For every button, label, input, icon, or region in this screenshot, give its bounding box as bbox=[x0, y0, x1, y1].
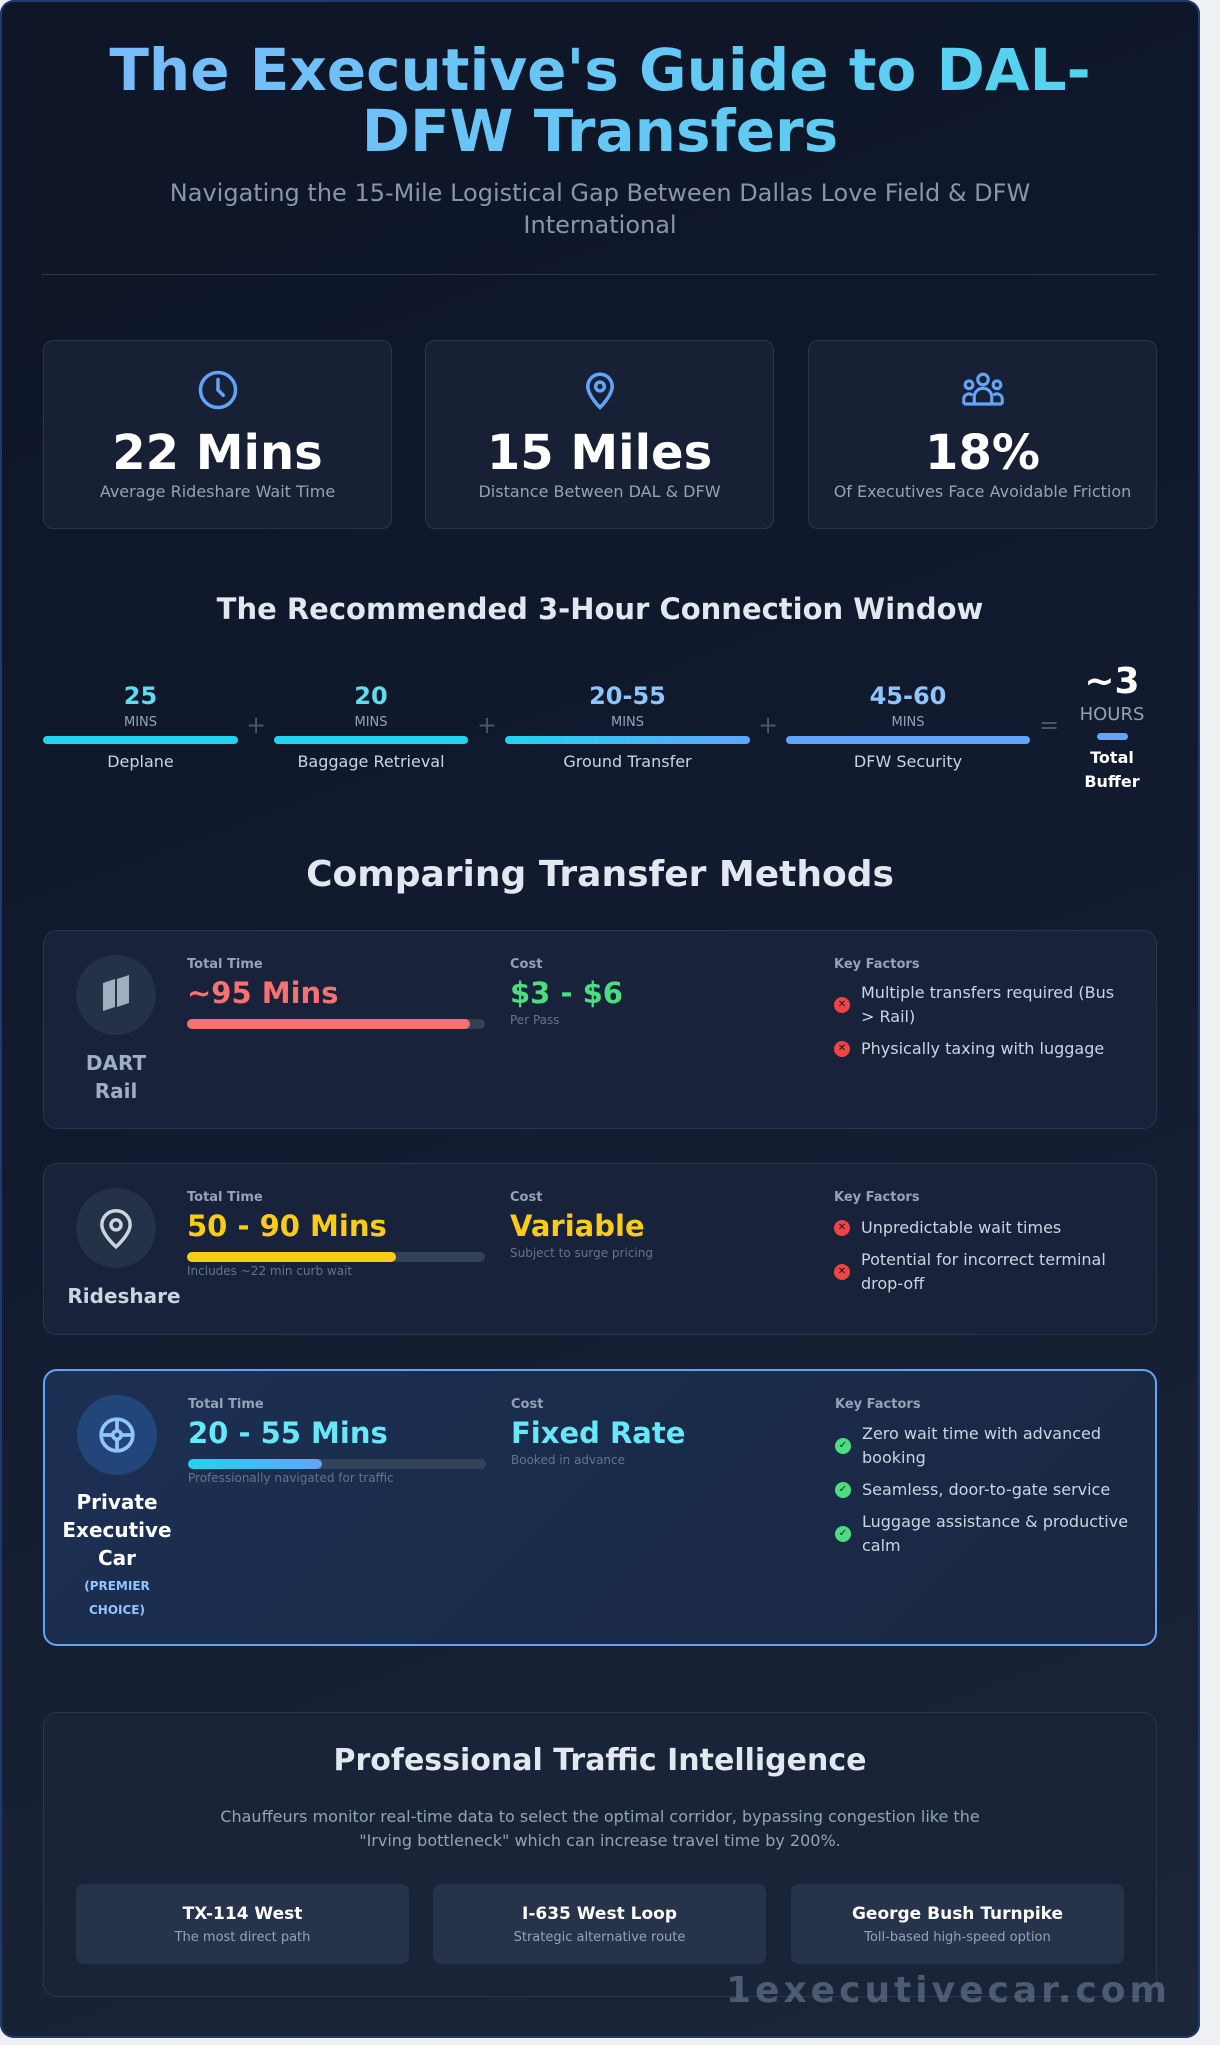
key factors: ✓ bbox=[839, 1528, 847, 1539]
step: ground transfer: 20-55 bbox=[589, 682, 666, 710]
step: ground transfer: MINS bbox=[611, 715, 644, 730]
step: security bbox=[786, 682, 1030, 771]
key factors: ✕ bbox=[838, 999, 846, 1010]
card: Private Executive Car bbox=[43, 1369, 1157, 1646]
stat card: distance: 15 Miles bbox=[487, 425, 712, 481]
key factors: > Rail) bbox=[861, 1007, 915, 1026]
card: DART Rail: ~95 Mins bbox=[187, 976, 338, 1010]
total buffer bbox=[1080, 661, 1144, 791]
heading: comparing: Comparing Transfer Methods bbox=[306, 854, 894, 895]
key factors: Physically taxing with luggage bbox=[861, 1039, 1104, 1058]
subtitle: Navigating the 15-Mile Logistical Gap Between Dallas Love Field & DFW bbox=[170, 179, 1030, 207]
stat card: friction: Of Executives Face Avoidable Friction bbox=[834, 482, 1131, 501]
card: DART Rail: Cost bbox=[510, 957, 542, 972]
title: The Executive's Guide to DAL- bbox=[109, 36, 1091, 104]
icon: clock bbox=[198, 370, 238, 410]
route: George Bush bbox=[791, 1884, 1124, 1964]
total buffer: HOURS bbox=[1080, 704, 1144, 725]
step: baggage bbox=[274, 682, 468, 771]
stat card: wait time bbox=[43, 340, 392, 529]
step: deplane: 25 bbox=[124, 682, 157, 710]
card: Rideshare: Total Time bbox=[187, 1190, 263, 1205]
key factors: Seamless, door-to-gate service bbox=[862, 1480, 1110, 1499]
stat card: distance bbox=[425, 340, 774, 529]
total buffer: Total bbox=[1090, 748, 1134, 767]
key factors: ✕ bbox=[838, 1222, 846, 1233]
card: DART Rail bbox=[43, 930, 1157, 1129]
paragraph bbox=[220, 1807, 980, 1850]
card: Private Executive Car: CHOICE) bbox=[89, 1603, 145, 1617]
step: baggage: 20 bbox=[354, 682, 388, 710]
route: I-635: I-635 West Loop bbox=[522, 1904, 677, 1924]
card: Private Executive Car: Cost bbox=[511, 1397, 543, 1412]
card: Private Executive Car: Total Time bbox=[188, 1397, 264, 1412]
step: ground transfer bbox=[505, 682, 750, 771]
step: ground transfer: Ground Transfer bbox=[563, 752, 692, 771]
stat card: distance: Distance Between DAL & DFW bbox=[478, 482, 721, 501]
icon: pin bbox=[76, 1188, 156, 1268]
card: Private Executive Car: 20 - 55 Mins bbox=[188, 1416, 388, 1450]
step: baggage: Baggage Retrieval bbox=[297, 752, 445, 771]
key factors bbox=[834, 1218, 1106, 1293]
stat card: wait time: Average Rideshare Wait Time bbox=[100, 482, 335, 501]
key factors: Unpredictable wait times bbox=[861, 1218, 1061, 1237]
card: Private Executive Car: Private bbox=[76, 1490, 158, 1514]
stat card: friction: 18% bbox=[925, 425, 1040, 481]
card: Private Executive Car: (PREMIER bbox=[84, 1579, 150, 1593]
route: TX-114 bbox=[76, 1884, 409, 1964]
key factors bbox=[835, 1424, 1128, 1555]
text: = bbox=[1039, 711, 1059, 739]
title: DFW Transfers bbox=[362, 97, 838, 165]
card: Rideshare: Subject to surge pricing bbox=[510, 1246, 653, 1260]
heading: connection window: The Recommended 3-Hour Connection Window bbox=[217, 592, 983, 626]
route: I-635 bbox=[433, 1884, 766, 1964]
card: Private Executive Car: Executive bbox=[62, 1518, 172, 1542]
key factors: ✓ bbox=[839, 1440, 847, 1451]
key factors: ✕ bbox=[838, 1043, 846, 1054]
card: Private Executive Car: Booked in advance bbox=[511, 1453, 625, 1467]
step: deplane: Deplane bbox=[107, 752, 174, 771]
route: TX-114: The most direct path bbox=[175, 1930, 310, 1945]
card: Private Executive Car: Key Factors bbox=[835, 1397, 921, 1412]
card: DART Rail: $3 - $6 bbox=[510, 976, 623, 1010]
key factors: Multiple transfers required (Bus bbox=[861, 983, 1114, 1002]
paragraph: "Irving bottleneck" which can increase travel time by 200%. bbox=[359, 1831, 841, 1850]
total buffer: ~3 bbox=[1084, 661, 1140, 702]
card: Rideshare: Key Factors bbox=[834, 1190, 920, 1205]
card: Rideshare: Rideshare bbox=[67, 1284, 181, 1308]
paragraph: Chauffeurs monitor real-time data to select the optimal corridor, bypassing congestion like the bbox=[220, 1807, 980, 1826]
card: Private Executive Car: Fixed Rate bbox=[511, 1416, 685, 1450]
card: Private Executive Car: Car bbox=[98, 1546, 136, 1570]
card: Rideshare: 50 - 90 Mins bbox=[187, 1209, 387, 1243]
step: security: MINS bbox=[891, 715, 925, 730]
route: TX-114: TX-114 West bbox=[183, 1904, 302, 1924]
stat card: wait time: 22 Mins bbox=[112, 425, 323, 481]
step: baggage: MINS bbox=[354, 715, 388, 730]
card: DART Rail: Per Pass bbox=[510, 1013, 560, 1027]
text: + bbox=[246, 711, 266, 739]
text: + bbox=[758, 711, 778, 739]
card: Rideshare: Variable bbox=[510, 1209, 645, 1243]
card: DART Rail: Rail bbox=[95, 1079, 137, 1103]
step: security: 45-60 bbox=[870, 682, 946, 710]
card: DART Rail: Total Time bbox=[187, 957, 263, 972]
title bbox=[0, 40, 1200, 162]
card: Rideshare: Includes ~22 min curb wait bbox=[187, 1264, 352, 1278]
stat card: friction bbox=[808, 340, 1157, 529]
icon: rail bbox=[76, 955, 156, 1035]
card: Rideshare: Cost bbox=[510, 1190, 542, 1205]
card: Private Executive Car: Professionally navigated for traffic bbox=[188, 1471, 394, 1485]
icon: steering wheel bbox=[77, 1395, 157, 1475]
step: security: DFW Security bbox=[854, 752, 962, 771]
key factors: ✓ bbox=[839, 1484, 847, 1495]
card: DART Rail: DART bbox=[86, 1051, 146, 1075]
key factors: Potential for incorrect terminal drop-off bbox=[861, 1250, 1106, 1293]
route: I-635: Strategic alternative route bbox=[514, 1930, 685, 1945]
timeline bbox=[43, 661, 1144, 791]
key factors: Zero wait time with advanced booking bbox=[862, 1424, 1101, 1467]
key factors: Luggage assistance & productive calm bbox=[862, 1512, 1128, 1555]
watermark: 1executivecar.com bbox=[726, 1970, 1171, 2011]
heading: Professional Traffic Intelligence bbox=[334, 1743, 866, 1778]
icon: group bbox=[962, 372, 1004, 406]
key factors bbox=[834, 983, 1114, 1058]
step: deplane: MINS bbox=[124, 715, 157, 730]
subtitle bbox=[170, 179, 1030, 239]
step: deplane bbox=[43, 682, 238, 771]
card: Rideshare bbox=[43, 1163, 1157, 1335]
panel: traffic intelligence bbox=[43, 1712, 1157, 1997]
text: + bbox=[477, 711, 497, 739]
route: George Bush: Toll-based high-speed option bbox=[864, 1930, 1051, 1945]
icon: map pin bbox=[586, 372, 614, 410]
key factors: ✕ bbox=[838, 1266, 846, 1277]
subtitle: International bbox=[523, 211, 677, 239]
total buffer: Buffer bbox=[1084, 772, 1140, 791]
card: DART Rail: Key Factors bbox=[834, 957, 920, 972]
route: George Bush: George Bush Turnpike bbox=[852, 1904, 1063, 1924]
